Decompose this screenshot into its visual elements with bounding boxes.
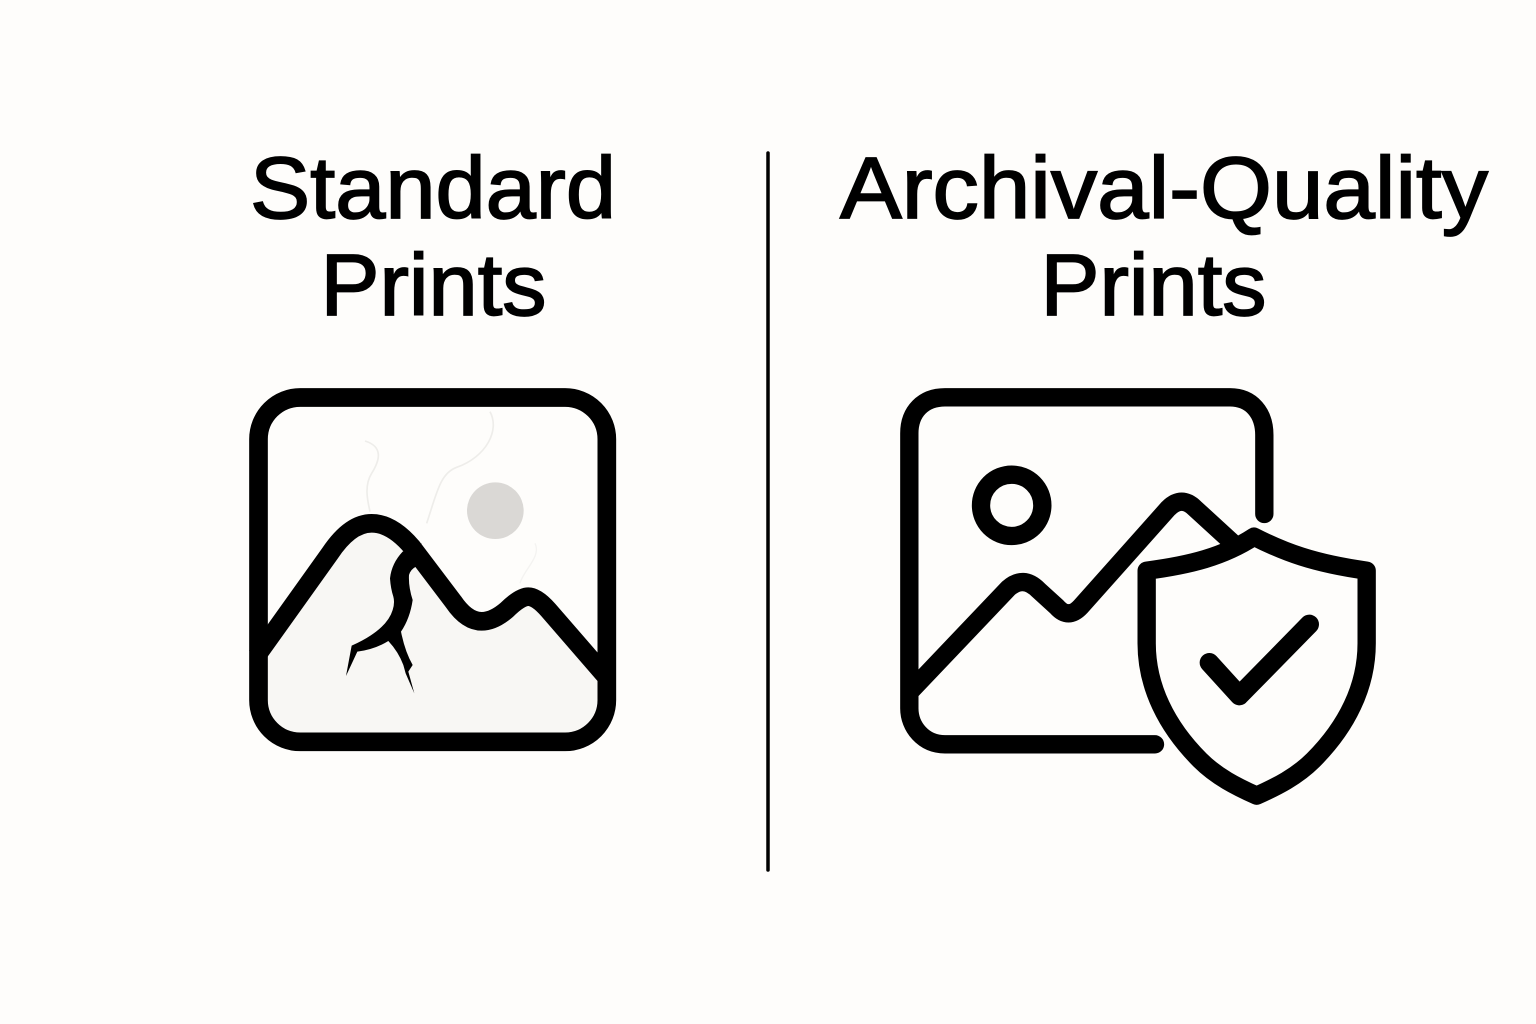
icon: archival print with shield — [909, 397, 1367, 796]
frame — [258, 397, 607, 742]
crack — [346, 543, 422, 693]
center divider — [766, 153, 770, 870]
sun — [981, 475, 1042, 536]
heading: Archival-Quality Prints: Archival-Quality — [840, 140, 1489, 237]
check mark — [1209, 624, 1309, 696]
frame — [909, 397, 1264, 744]
icon: damaged standard print — [257, 397, 607, 742]
mountain fill — [268, 523, 598, 733]
heading: Archival-Quality Prints: Prints — [1040, 237, 1266, 334]
shield — [1147, 537, 1367, 796]
faint stain line near ridge — [520, 543, 536, 583]
mountain outline — [910, 502, 1235, 692]
faded sun — [467, 482, 524, 539]
heading: Standard Prints: Prints — [320, 237, 546, 334]
heading: Standard Prints: Standard — [250, 140, 616, 237]
heading: Standard Prints — [250, 140, 616, 334]
heading: Archival-Quality Prints — [840, 140, 1489, 334]
faint stain lines — [365, 412, 493, 523]
mountain outline — [257, 523, 605, 675]
